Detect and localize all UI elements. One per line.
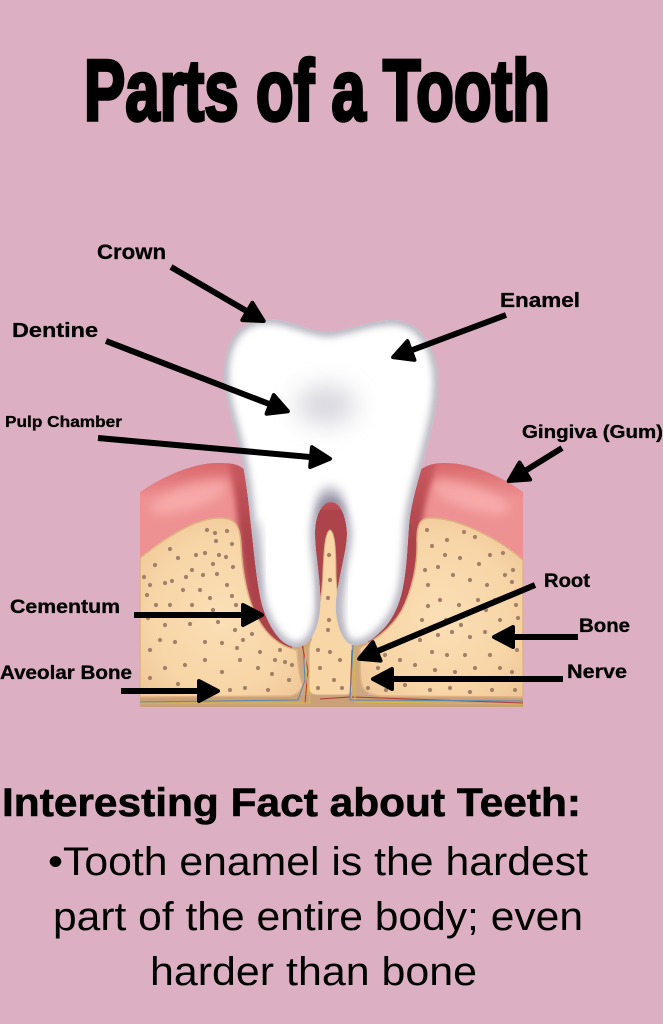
tooth xyxy=(224,319,438,647)
label: crown: Crown xyxy=(97,241,166,264)
fact text: part of the entire body; even xyxy=(53,895,583,939)
label: aveolar bone: Aveolar Bone xyxy=(0,663,132,684)
arrow: cementum xyxy=(134,612,260,618)
arrow: nerve xyxy=(375,676,563,682)
fact text: •Tooth enamel is the hardest xyxy=(48,840,588,884)
tooth diagram xyxy=(140,319,523,707)
label: bone: Bone xyxy=(579,616,630,637)
fact text xyxy=(48,840,588,994)
gum tissue xyxy=(140,463,523,648)
label: cementum: Cementum xyxy=(10,597,120,618)
label: pulp chamber: Pulp Chamber xyxy=(5,414,122,431)
label: nerve: Nerve xyxy=(567,662,627,683)
label: dentine: Dentine xyxy=(12,320,98,342)
arrow: root xyxy=(361,585,535,658)
central bone xyxy=(309,530,352,695)
label: root: Root xyxy=(544,571,591,592)
label: enamel: Enamel xyxy=(500,290,580,312)
arrow: aveolar bone xyxy=(121,688,216,694)
arrow: gingiva xyxy=(510,448,562,480)
heading: interesting fact: Interesting Fact about Teeth: xyxy=(2,781,581,825)
arrow: bone xyxy=(496,634,578,640)
fact text: harder than bone xyxy=(150,950,477,994)
right alveolar bone xyxy=(360,518,523,697)
label: gingiva: Gingiva (Gum) xyxy=(522,422,663,442)
left alveolar bone xyxy=(140,518,303,697)
dark gum around notch xyxy=(313,510,348,650)
arrow: enamel xyxy=(395,315,506,356)
ligament and floor xyxy=(140,640,523,707)
arrow: dentine xyxy=(106,341,286,410)
arrow: crown xyxy=(171,267,262,320)
bone pores xyxy=(144,530,518,692)
nerves and vessels xyxy=(140,645,523,704)
arrow: pulp chamber xyxy=(98,438,328,459)
